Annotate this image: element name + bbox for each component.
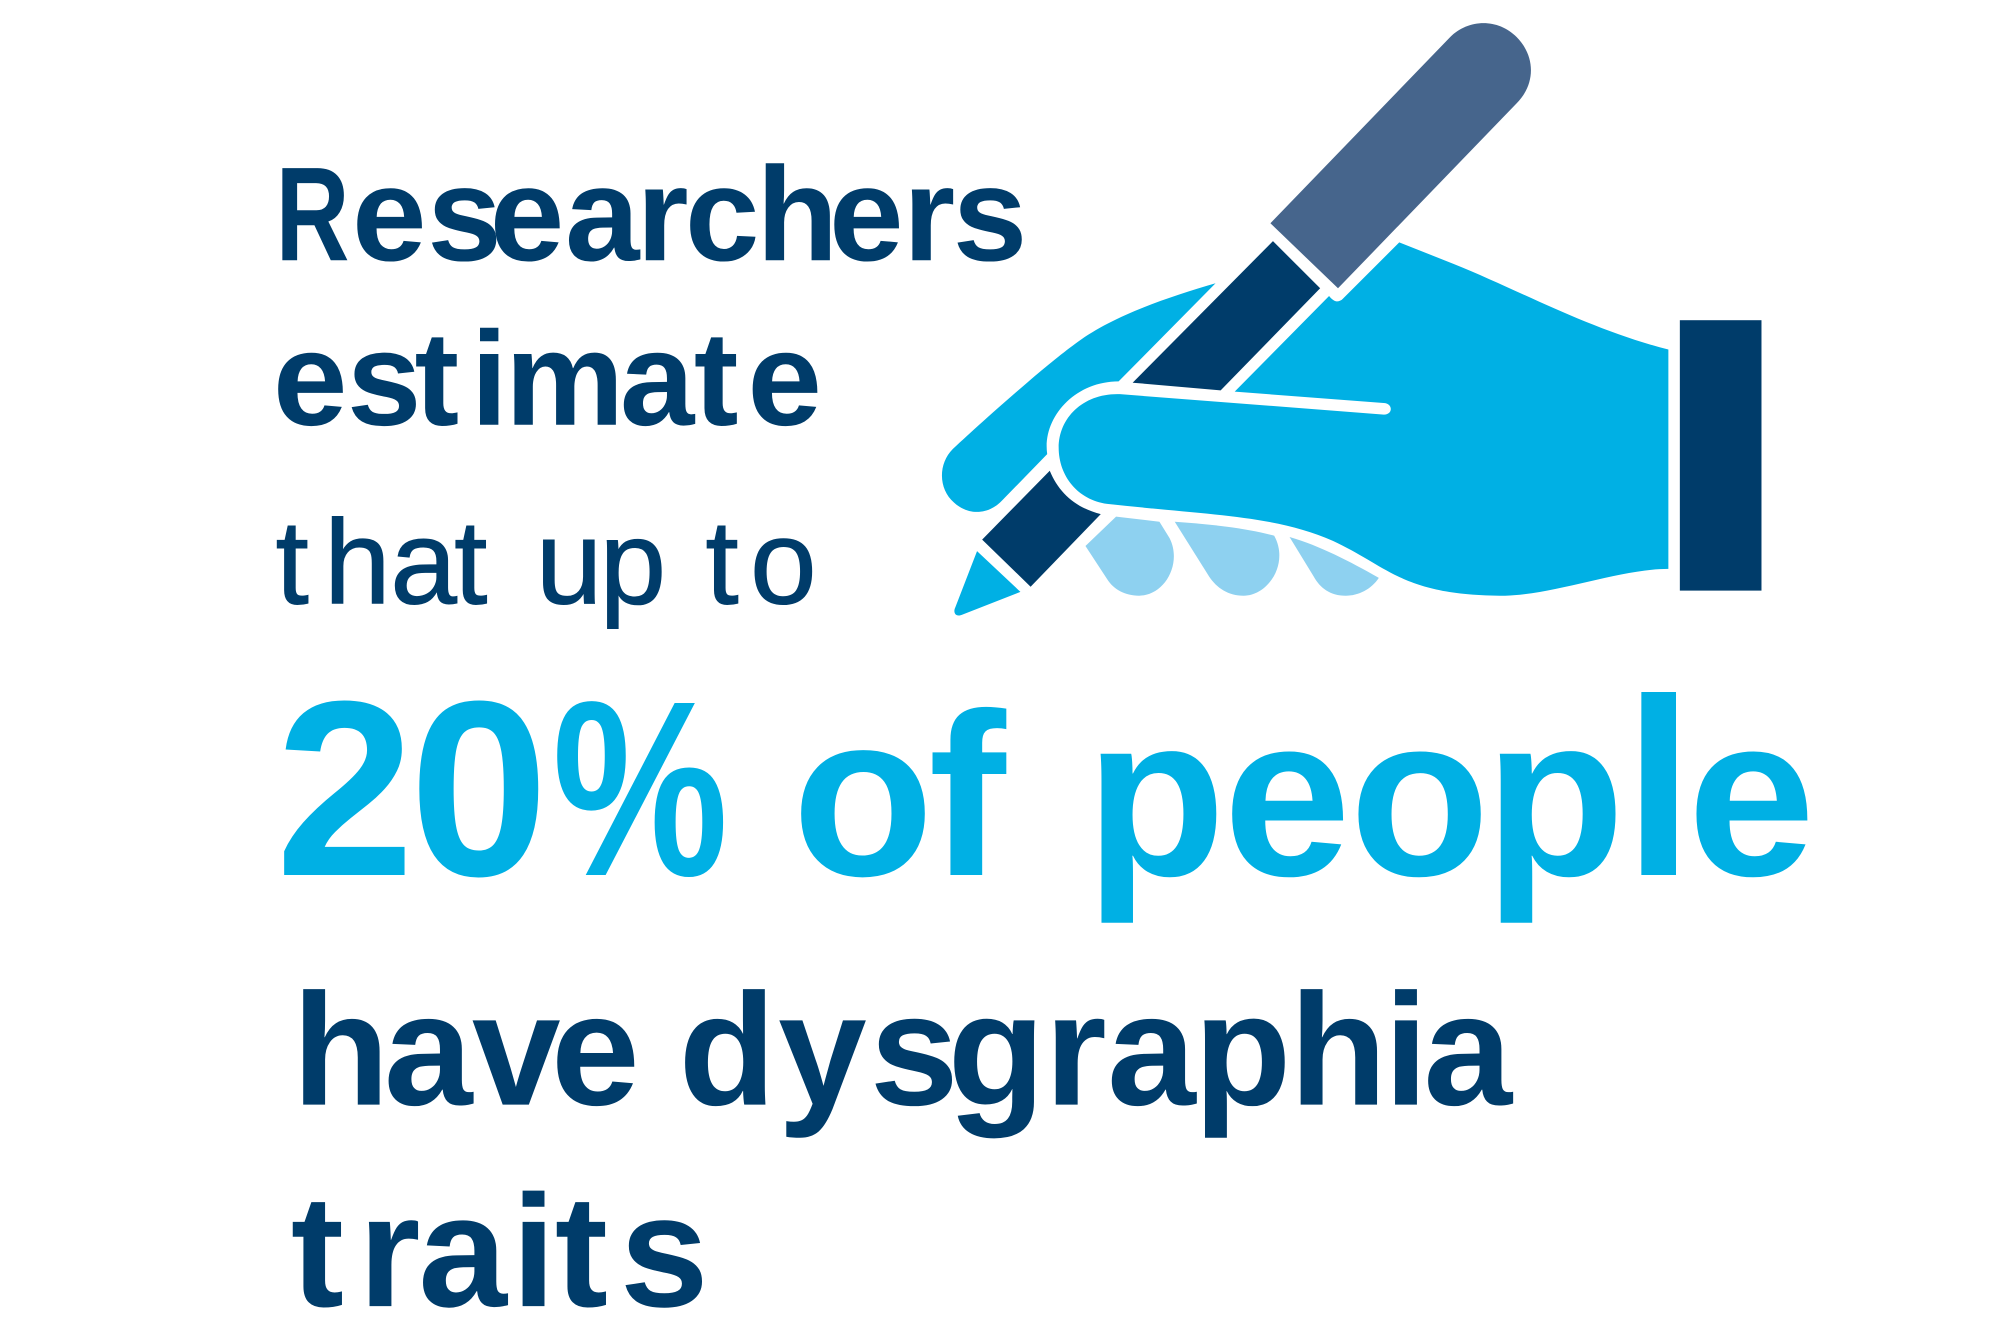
index finger xyxy=(942,283,1216,512)
icon: hand writing with pen xyxy=(942,23,1761,616)
heading: Researchers: esearchers xyxy=(352,140,1027,289)
statistic: 20% of people: 20 xyxy=(276,649,548,928)
text block: that up to xyxy=(276,495,817,629)
statistic: 20% of people: of xyxy=(792,666,1007,925)
pen tip xyxy=(954,551,1020,616)
statistic: 20% of people: people xyxy=(1085,646,1815,929)
text block: have dysgraphia xyxy=(292,961,1513,1139)
finger one xyxy=(1085,517,1174,596)
heading: estimate: estimate xyxy=(273,305,822,454)
text block: that up to: that xyxy=(276,495,487,629)
text block: have dysgraphia: dysgraphia xyxy=(679,961,1513,1139)
shirt cuff xyxy=(1680,320,1761,591)
heading: Researchers: R xyxy=(276,140,349,289)
text block: that up to: to xyxy=(705,495,817,629)
finger two xyxy=(1175,522,1279,596)
finger three xyxy=(1290,537,1379,596)
statistic: 20% of people xyxy=(276,646,1815,929)
pen cap xyxy=(1270,23,1531,288)
text block: have dysgraphia: have xyxy=(292,961,640,1139)
hand and thumb xyxy=(1059,242,1668,596)
pen barrel upper xyxy=(1133,241,1320,390)
pen barrel lower xyxy=(982,471,1101,587)
statistic: 20% of people: % xyxy=(552,649,728,928)
text block: that up to: up xyxy=(536,495,666,629)
